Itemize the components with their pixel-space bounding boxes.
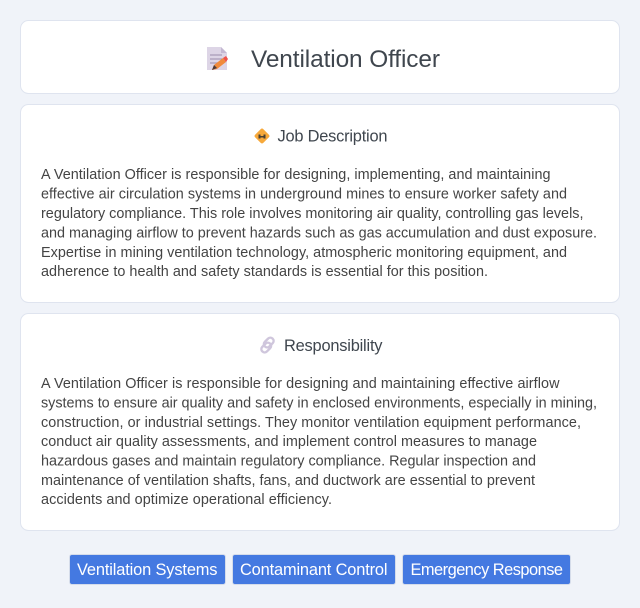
text block: job description: regulatory compliance. This role involves monitoring air quality, controlling gas levels, [41,206,584,222]
text block: responsibility: A Ventilation Officer is responsible for designing and maintaining effective airflow [41,376,560,392]
text block: responsibility: accidents and optimize operational efficiency. [41,492,332,508]
tag: emergency response [402,554,570,584]
text block: job description: effective air circulation systems in underground mines to ensure worker safety and [41,186,567,202]
heading: job description: Job Description [278,128,388,146]
tag: emergency response: Emergency Response [410,561,563,579]
title: Ventilation Officer [251,46,440,73]
panel: title header [20,20,620,94]
text block: responsibility: hazardous gases and maintain regulatory compliance. Regular inspection and [41,453,536,469]
text block: responsibility: systems to ensure air quality and safety in enclosed environments, especially in mining, [41,395,597,411]
tag: ventilation systems [70,554,226,584]
tag: contaminant control [232,554,396,584]
tag: ventilation systems: Ventilation Systems [77,561,218,579]
text block: job description: Expertise in mining ventilation technology, atmospheric monitoring equipment, and [41,245,567,261]
icon: construction diamond sign [254,128,270,144]
heading: responsibility: Responsibility [284,337,383,355]
text block: job description: and managing airflow to prevent hazards such as gas accumulation and dust exposure. [41,225,597,241]
text block: responsibility: maintenance of ventilation shafts, fans, and ductwork are essential to prevent [41,473,535,489]
panel: job description [20,104,620,302]
text block: responsibility: construction, or industrial settings. They monitor ventilation equipment performance, [41,415,581,431]
tag: contaminant control: Contaminant Control [240,561,388,579]
text block: job description [41,167,597,280]
text block: responsibility: conduct air quality assessments, and implement control measures to manage [41,434,537,450]
text block: job description: A Ventilation Officer is responsible for designing, implementing, and maintaining [41,167,550,183]
icon: memo with pencil [207,47,228,70]
panel: responsibility [20,314,620,530]
icon: chain link [260,336,275,354]
text block: responsibility [41,376,597,508]
text block: job description: adherence to health and safety standards is essential for this position. [41,264,488,280]
